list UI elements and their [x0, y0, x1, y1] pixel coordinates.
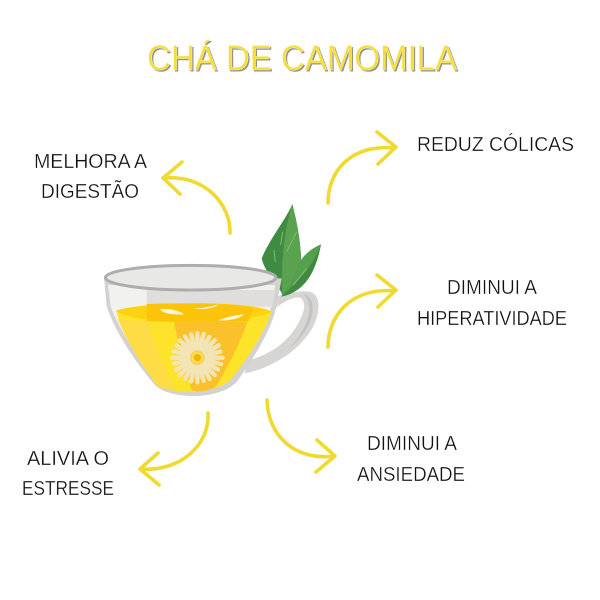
- icon: leaves: [262, 204, 321, 297]
- tea shaded band: [174, 322, 247, 391]
- label: alivia o estresse: [22, 447, 114, 500]
- label: diminui a ansiedade: DIMINUI A: [367, 432, 457, 455]
- tea reflections: [160, 304, 244, 320]
- label: alivia o estresse: ESTRESSE: [22, 477, 114, 500]
- glass body: [104, 278, 282, 396]
- arrow: to anxiety: [267, 400, 335, 472]
- label: diminui a hiperatividade: [417, 276, 567, 330]
- label: diminui a hiperatividade: DIMINUI A: [447, 276, 537, 299]
- arrow: to digestion: [163, 162, 230, 233]
- label: reduz cólicas: REDUZ CÓLICAS: [417, 133, 574, 156]
- tea shaded surface: [147, 303, 253, 322]
- arrow: to hyperactivity: [328, 275, 396, 347]
- arrow: to cramps: [328, 132, 396, 203]
- label: diminui a ansiedade: ANSIEDADE: [357, 463, 465, 486]
- label: diminui a hiperatividade: HIPERATIVIDADE: [417, 307, 567, 330]
- label: melhora a digestão: [34, 150, 147, 203]
- arrow: to stress: [140, 413, 208, 485]
- icon: chamomile flower: [172, 333, 223, 382]
- glass shaded panel: [147, 290, 275, 307]
- handle highlight: [287, 294, 313, 351]
- glass inner: [108, 285, 275, 389]
- tea left light panel: [118, 319, 177, 392]
- title: CHÁ DE CAMOMILA: [148, 40, 459, 80]
- tea surface: [116, 303, 272, 322]
- label: melhora a digestão: DIGESTÃO: [41, 180, 139, 203]
- label: diminui a ansiedade: [357, 432, 465, 486]
- illustration: tea cup with chamomile: [104, 204, 321, 396]
- cup rim: [105, 265, 276, 290]
- cup handle: [245, 291, 319, 373]
- label: alivia o estresse: ALIVIA O: [27, 447, 109, 470]
- tea liquid: [116, 303, 272, 391]
- label: melhora a digestão: MELHORA A: [34, 150, 147, 173]
- title: CHÁ DE CAMOMILA: [147, 39, 458, 78]
